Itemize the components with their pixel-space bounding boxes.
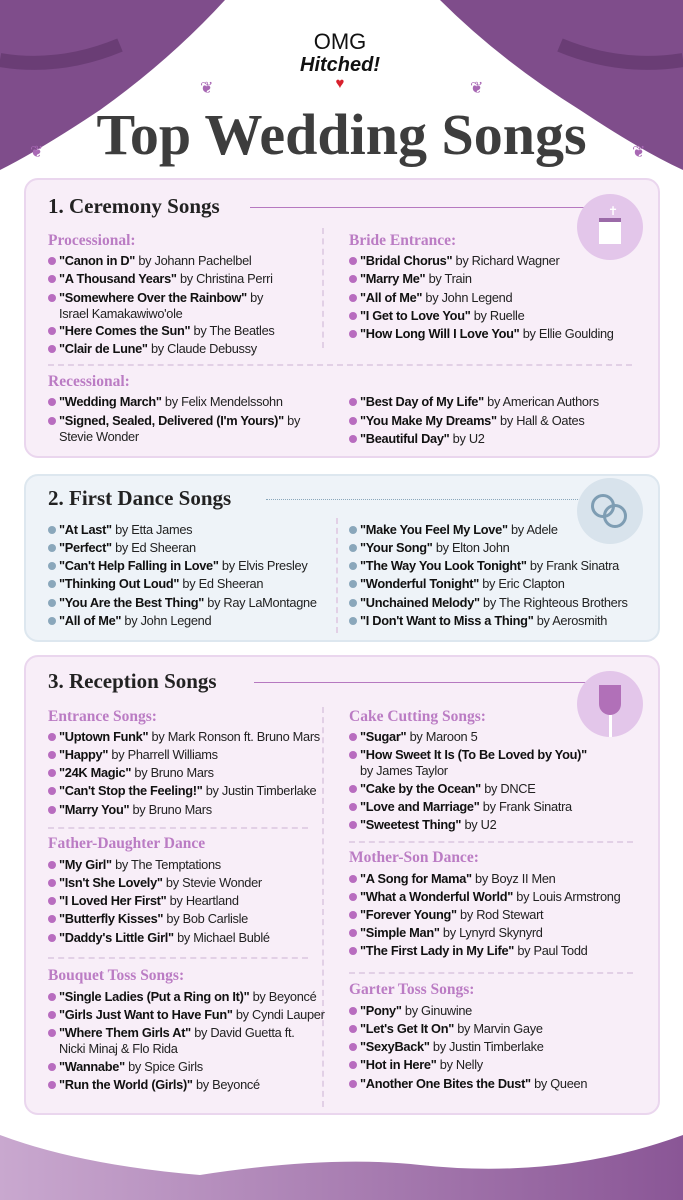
panel: first dance: "At Last" by Etta James	[59, 522, 192, 537]
panel: ceremony: "Beautiful Day" by U2	[360, 431, 485, 446]
panel: reception: "Love and Marriage" by Frank Sinatra	[360, 799, 572, 814]
panel: reception: "The First Lady in My Life" by Paul Todd	[360, 943, 587, 958]
panel: ceremony: "Here Comes the Sun" by The Beatles	[59, 323, 274, 338]
panel: reception: Entrance Songs:	[48, 708, 157, 725]
panel: reception: "Sugar" by Maroon 5	[360, 729, 477, 744]
bottom wave	[0, 1135, 683, 1200]
panel: ceremony: 1. Ceremony Songs	[48, 194, 220, 218]
panel: ceremony: "Best Day of My Life" by American Authors	[360, 394, 599, 409]
panel: first dance: 2. First Dance Songs	[48, 486, 231, 510]
panel: first dance: "Perfect" by Ed Sheeran	[59, 540, 196, 555]
panel: ceremony: "Bridal Chorus" by Richard Wagner	[360, 253, 559, 268]
panel: reception: Garter Toss Songs:	[349, 981, 474, 998]
panel: ceremony: "Clair de Lune" by Claude Debussy	[59, 341, 257, 356]
panel: reception: "Let's Get It On" by Marvin Gaye	[360, 1021, 543, 1036]
panel: reception: "Another One Bites the Dust" by Queen	[360, 1076, 587, 1091]
panel: reception: "Cake by the Ocean" by DNCE	[360, 781, 535, 796]
panel: reception: "Hot in Here" by Nelly	[360, 1057, 483, 1072]
panel: first dance: "I Don't Want to Miss a Thing" by Aerosmith	[360, 613, 607, 628]
panel: ceremony: "How Long Will I Love You" by Ellie Goulding	[360, 326, 614, 341]
panel: ceremony: "Marry Me" by Train	[360, 271, 472, 286]
panel: reception: "A Song for Mama" by Boyz II Men	[360, 871, 556, 886]
panel: reception: "Forever Young" by Rod Stewart	[360, 907, 543, 922]
icon: chapel	[577, 194, 643, 260]
leaves	[30, 80, 645, 161]
panel: first dance: "The Way You Look Tonight" by Frank Sinatra	[360, 558, 619, 573]
logo: OMG	[314, 29, 366, 54]
panel: reception: "24K Magic" by Bruno Mars	[59, 765, 214, 780]
panel: ceremony: "I Get to Love You" by Ruelle	[360, 308, 524, 323]
panel: reception: "How Sweet It Is (To Be Loved by You)"	[360, 747, 587, 762]
panel: reception: 3. Reception Songs	[48, 669, 217, 693]
panel: ceremony: Recessional:	[48, 373, 130, 390]
panel: first dance: "Thinking Out Loud" by Ed Sheeran	[59, 576, 263, 591]
panel: ceremony: Processional:	[48, 232, 136, 249]
panel: reception: "Uptown Funk" by Mark Ronson ft. Bruno Mars	[59, 729, 320, 744]
panel: reception: "Single Ladies (Put a Ring on It)" by Beyoncé	[59, 989, 316, 1004]
panel: reception: "Where Them Girls At" by David Guetta ft.	[59, 1025, 294, 1040]
panel: first dance: "Make You Feel My Love" by Adele	[360, 522, 558, 537]
panel: reception: "Can't Stop the Feeling!" by Justin Timberlake	[59, 783, 316, 798]
icon: chapel: ✝	[608, 204, 618, 218]
panel: ceremony: "Canon in D" by Johann Pachelbel	[59, 253, 251, 268]
panel: ceremony: "Somewhere Over the Rainbow" by	[59, 290, 263, 305]
panel: ceremony	[24, 178, 660, 458]
panel: reception: "Girls Just Want to Have Fun" by Cyndi Lauper	[59, 1007, 325, 1022]
panel: ceremony: Stevie Wonder	[59, 429, 139, 444]
panel: reception: "Daddy's Little Girl" by Michael Bublé	[59, 930, 270, 945]
panel: ceremony: Israel Kamakawiwo'ole	[59, 306, 182, 321]
panel: reception: "My Girl" by The Temptations	[59, 857, 221, 872]
panel: first dance: "Your Song" by Elton John	[360, 540, 509, 555]
panel: reception: Bouquet Toss Songs:	[48, 967, 184, 984]
title: Top Wedding Songs	[96, 102, 587, 167]
panel: first dance	[24, 474, 660, 642]
panel: first dance: "You Are the Best Thing" by Ray LaMontagne	[59, 595, 317, 610]
panel: first dance: "Unchained Melody" by The Righteous Brothers	[360, 595, 628, 610]
panel: reception: "Happy" by Pharrell Williams	[59, 747, 218, 762]
logo	[300, 29, 380, 92]
panel: reception: "Isn't She Lovely" by Stevie Wonder	[59, 875, 262, 890]
panel: reception: "What a Wonderful World" by Louis Armstrong	[360, 889, 620, 904]
panel: reception: "Marry You" by Bruno Mars	[59, 802, 212, 817]
logo: Hitched!	[300, 54, 380, 76]
panel: reception: "Pony" by Ginuwine	[360, 1003, 472, 1018]
panel: reception: Nicki Minaj & Flo Rida	[59, 1041, 178, 1056]
panel: reception: Cake Cutting Songs:	[349, 708, 486, 725]
panel: reception: "Run the World (Girls)" by Beyoncé	[59, 1077, 260, 1092]
panel: reception: Father-Daughter Dance	[48, 835, 205, 852]
panel: reception: "SexyBack" by Justin Timberlake	[360, 1039, 544, 1054]
panel: reception: by James Taylor	[360, 763, 448, 778]
panel: first dance: "Wonderful Tonight" by Eric Clapton	[360, 576, 565, 591]
logo: ♥	[336, 75, 344, 92]
panel: reception: "Butterfly Kisses" by Bob Carlisle	[59, 911, 248, 926]
panel: ceremony: "Wedding March" by Felix Mendelssohn	[59, 394, 283, 409]
text: ❦	[30, 144, 43, 161]
panel: reception	[24, 655, 660, 1115]
panel: reception: "Wannabe" by Spice Girls	[59, 1059, 203, 1074]
text: ❦	[632, 144, 645, 161]
panel: ceremony: "You Make My Dreams" by Hall & Oates	[360, 413, 584, 428]
panel: first dance: "All of Me" by John Legend	[59, 613, 211, 628]
curtains	[0, 0, 683, 170]
panel: reception: "Sweetest Thing" by U2	[360, 817, 496, 832]
panel: ceremony: Bride Entrance:	[349, 232, 456, 249]
icon: rings	[577, 478, 643, 544]
panel: ceremony: "A Thousand Years" by Christina Perri	[59, 271, 273, 286]
panel: first dance: "Can't Help Falling in Love" by Elvis Presley	[59, 558, 307, 573]
icon: glass	[577, 671, 643, 737]
panel: ceremony: "All of Me" by John Legend	[360, 290, 512, 305]
text: ❦	[200, 80, 213, 97]
panel: reception: Mother-Son Dance:	[349, 849, 479, 866]
panel: reception: "Simple Man" by Lynyrd Skynyrd	[360, 925, 543, 940]
panel: ceremony: "Signed, Sealed, Delivered (I'm Yours)" by	[59, 413, 300, 428]
panel: reception: "I Loved Her First" by Heartland	[59, 893, 239, 908]
text: ❦	[470, 80, 483, 97]
